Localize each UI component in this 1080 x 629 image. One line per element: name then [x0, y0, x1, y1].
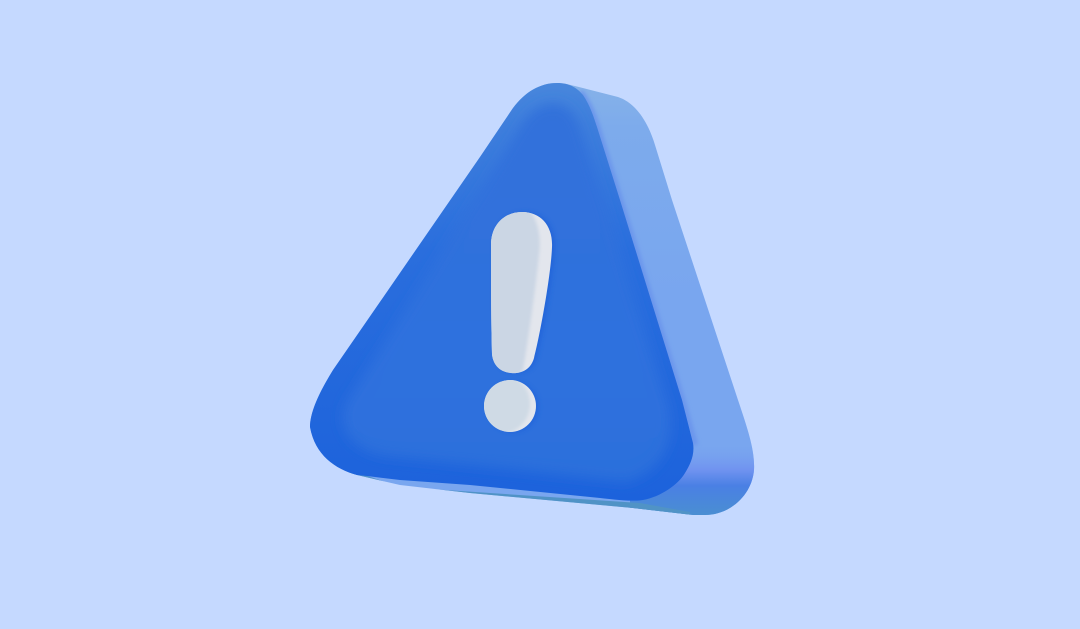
icon: triangle side depth — [300, 75, 770, 525]
icon: triangle front face — [310, 83, 694, 501]
exclamation stem — [491, 212, 555, 374]
exclamation dot — [484, 380, 537, 432]
warning triangle illustration — [310, 83, 754, 515]
icon: exclamation mark — [484, 212, 555, 432]
